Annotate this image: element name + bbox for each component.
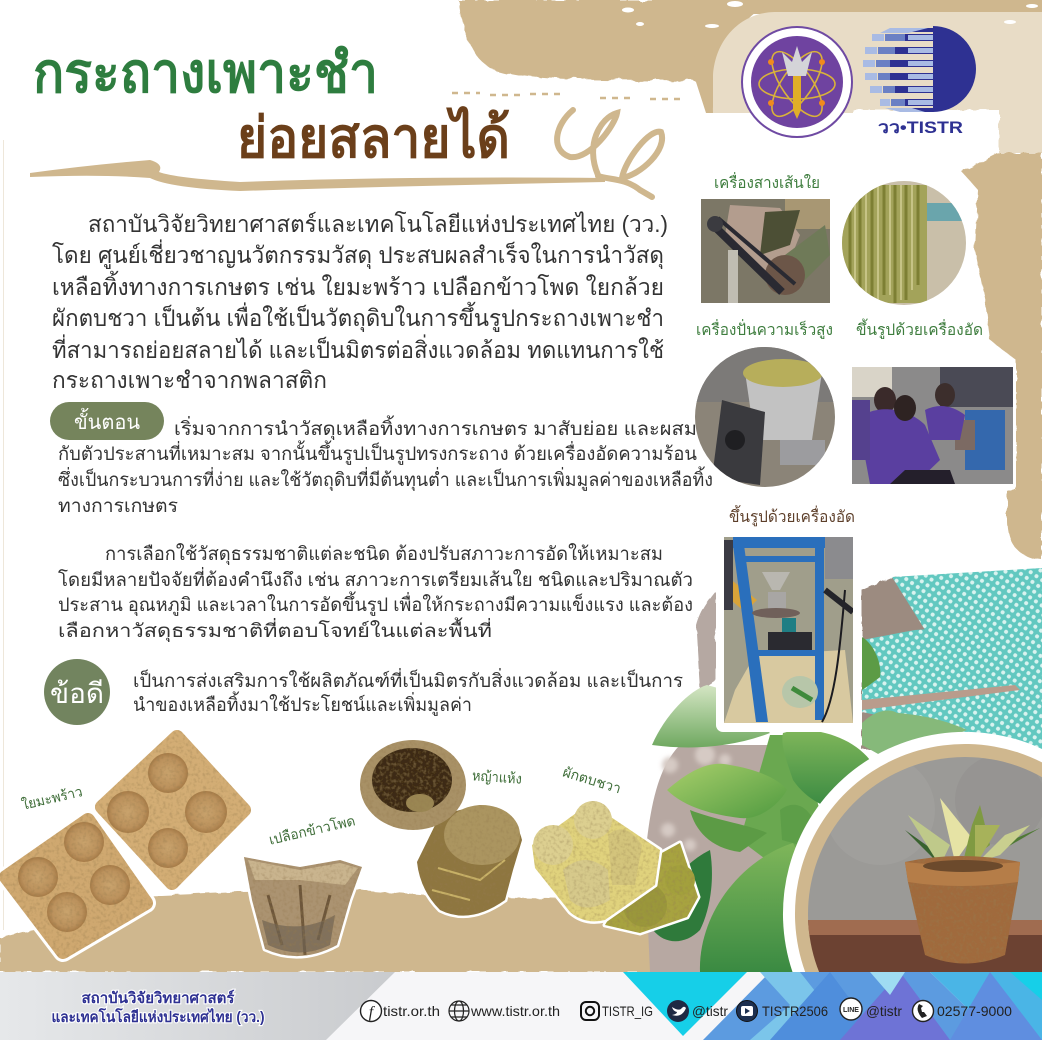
soil background [647,592,768,972]
footer: contact icons and handles: tistr.or.th [383,1003,440,1019]
footer: contact icons and handles: www.tistr.or.th [470,1003,560,1019]
logo: ministry seal [742,27,852,137]
product: water hyacinth trays [532,801,698,933]
product: dried grass pots [360,740,522,916]
icon: youtube [736,1000,758,1022]
footer: contact icons and handles: TISTR_IG [602,1003,653,1019]
icon: instagram [581,1002,599,1020]
photo collage: gloves, soil and basil leaves [645,568,1042,972]
caption: forming by press: ขึ้นรูปด้วยเครื่องอัด [856,318,983,340]
conditions paragraph: เลือกหาวัสดุธรรมชาติที่ตอบโจทย์ในแต่ละพื้นที่ [58,617,492,643]
title line 2: ย่อยสลายได้ [237,105,510,169]
footer: organisation name [52,989,264,1026]
conditions paragraph: โดยมีหลายปัจจัยที่ต้องคำนึงถึง เช่น สภาวะการเตรียมเส้นใย ชนิดและปริมาณตัว [58,567,693,590]
icon: line: LINE [843,1007,859,1014]
steps badge [50,402,164,440]
background: tan brush block top right [452,0,1042,560]
photo: people forming pots [845,361,1016,489]
intro paragraph: ที่สามารถย่อยสลายได้ และเป็นมิตรต่อสิ่งแวดล้อม ทดแทนการใช้ [52,334,664,363]
footer: contact icons and handles: @tistr [866,1003,902,1019]
advantages text: นำของเหลือทิ้งมาใช้ประโยชน์และเพิ่มมูลค่า [133,691,472,716]
footer: contact icons and handles [360,998,1012,1022]
product: coconut fibre trays [6,737,244,952]
steps paragraph: ทางการเกษตร [58,495,178,516]
brush underline with curl [30,110,662,197]
press machine caption: ขึ้นรูปด้วยเครื่องอัด [729,505,855,527]
logo wordmark: วว•TISTR [878,118,963,137]
conditions paragraph [58,543,693,643]
background: faint left edge line [3,140,4,930]
press machine photo [716,528,861,732]
footer: contact icons and handles: TISTR2506 [762,1003,828,1019]
basil leaves [652,637,967,972]
icon: facebook: f [369,1004,376,1021]
photo: hanging fibres [842,181,966,305]
caption: เครื่องสางเส้นใย [714,172,820,192]
label: coconut fibre: ใยมะพร้าว [20,783,84,813]
label: water hyacinth: ผักตบชวา [561,764,623,796]
steps badge: ขั้นตอน [74,408,140,434]
footer: organisation name: และเทคโนโลยีแห่งประเทศไทย (วว.) [52,1007,264,1026]
icon: globe [449,1001,469,1021]
white ring [783,732,1042,972]
logos [742,26,976,137]
title [33,41,510,169]
label: corn husk: เปลือกข้าวโพด [267,812,357,848]
background: tan band at the bottom [0,890,665,972]
gloves [862,568,1042,750]
logo: TISTR [863,26,976,137]
advantages badge [44,659,110,725]
intro paragraph: เหลือทิ้งทางการเกษตร เช่น ใยมะพร้าว เปลือกข้าวโพด ใยกล้วย [52,271,664,300]
product: corn husk pot [244,857,362,956]
circular potted plant photo [783,732,1042,972]
advantages text: เป็นการส่งเสริมการใช้ผลิตภัณฑ์ที่เป็นมิตรกับสิ่งแวดล้อม และเป็นการ [133,668,683,691]
title line 1: กระถางเพาะชำ [33,41,378,104]
photo: blender [695,347,835,487]
intro paragraph: โดย ศูนย์เชี่ยวชาญนวัตกรรมวัสดุ ประสบผลสำเร็จในการนำวัสดุ [52,239,664,269]
intro paragraph [52,211,668,393]
conditions paragraph: ประสาน อุณหภูมิ และเวลาในการอัดขึ้นรูป เพื่อให้กระถางมีความแข็งแรง และต้อง [58,591,693,617]
photo: fibre shredding machine [701,172,830,303]
advantages text [133,668,683,716]
icon: twitter [667,1000,689,1022]
conditions paragraph: การเลือกใช้วัสดุธรรมชาติแต่ละชนิด ต้องปรับสภาวะการอัดให้เหมาะสม [105,543,663,566]
steps paragraph [58,415,713,516]
steps paragraph: เริ่มจากการนำวัสดุเหลือทิ้งทางการเกษตร มาสับย่อย และผสม [174,415,697,441]
intro paragraph: ผักตบชวา เป็นต้น เพื่อใช้เป็นวัตถุดิบในการขึ้นรูปกระถางเพาะชำ [52,302,664,332]
intro paragraph: กระถางเพาะชำจากพลาสติก [52,367,327,393]
advantages badge: ข้อดี [50,678,104,709]
icon: facebook [360,1000,382,1022]
footer: contact icons and handles: 02577-9000 [937,1003,1012,1019]
tan ring [795,744,1042,972]
footer [0,972,1042,1040]
fibre pot [905,856,1020,964]
plant [905,798,1040,858]
intro paragraph: สถาบันวิจัยวิทยาศาสตร์และเทคโนโลยีแห่งประเทศไทย (วว.) [88,211,668,237]
footer: organisation name: สถาบันวิจัยวิทยาศาสตร์ [82,989,235,1007]
icon: phone [912,1000,934,1022]
footer: contact icons and handles: @tistr [692,1003,728,1019]
steps paragraph: กับตัวประสานที่เหมาะสม จากนั้นขึ้นรูปเป็นรูปทรงกระถาง ด้วยเครื่องอัดความร้อน [58,440,697,465]
label: dried grass: หญ้าแห้ง [472,767,522,787]
caption: high speed blender: เครื่องปั่นความเร็วสูง [696,319,833,340]
steps paragraph: ซึ่งเป็นกระบวนการที่ง่าย และใช้วัตถุดิบที่มีต้นทุนต่ำ และเป็นการเพิ่มมูลค่าของเหลือทิ้ง [58,466,713,492]
footer: geometric blue pattern [623,972,1042,1040]
icon: line [840,998,862,1020]
